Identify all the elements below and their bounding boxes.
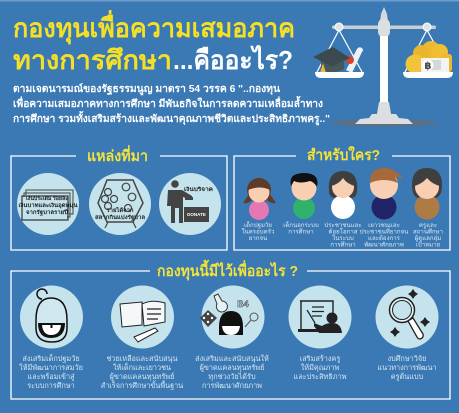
person: citizen xyxy=(324,171,362,248)
item: book support: ช่วยเหลือและสนับสนุน xyxy=(106,354,178,363)
item: teacher development: เสริมสร้างครู xyxy=(300,354,340,363)
icon: donation: เงินบริจาค xyxy=(184,186,213,193)
item: research: แนวทางการพัฒนา xyxy=(377,363,437,372)
person: teacher: ครูและ xyxy=(419,222,437,229)
icon: government budget: เงินประเดิม ร้อยละ xyxy=(26,194,68,202)
item: book support xyxy=(101,286,183,390)
icon: government budget: เงินบาทและเงินอุดหนุน xyxy=(18,202,78,209)
panel: purposes xyxy=(11,259,450,399)
title xyxy=(13,9,295,75)
intro text block: การศึกษา รวมทั้งเสริมสร้างและพัฒนาคุณภาพชีวิตและประสิทธิภาพครู.." xyxy=(13,110,330,126)
title: ...คืออะไร? xyxy=(173,44,293,75)
person: child xyxy=(242,178,276,242)
icon: government budget xyxy=(17,173,79,235)
person: citizen: ประชาชนและ xyxy=(324,222,362,229)
person: citizen: การศึกษา xyxy=(330,242,356,248)
icon: government budget: จากรัฐบาลรายปี xyxy=(26,208,69,216)
item: early childhood: ระบบการศึกษา xyxy=(27,381,75,390)
icon: coins and banknote: ฿ xyxy=(425,61,432,72)
item: talent development: ทุกช่วงวัยได้รับ xyxy=(208,372,256,381)
panel: sources xyxy=(11,145,227,250)
item: research xyxy=(376,286,438,381)
heading: sources: แหล่งที่มา xyxy=(87,145,148,165)
person: youth: ประชาชนที่ยากจน xyxy=(360,228,409,236)
item: research: งบศึกษาวิจัย xyxy=(388,354,426,363)
person: youth: และต้องการ xyxy=(368,235,401,242)
person: youth: พัฒนาศักยภาพ xyxy=(364,242,404,248)
icon: graduation cap and diploma xyxy=(313,47,363,73)
person: teacher: เป้าหมาย xyxy=(416,242,441,248)
item: early childhood: และพร้อมเข้าสู่ xyxy=(27,372,75,381)
item: teacher development xyxy=(288,286,352,381)
item: talent development xyxy=(195,286,269,390)
item: talent development: ส่งเสริมและสนับสนุนให้ xyxy=(195,354,269,363)
person: youth: เยาวชนและ xyxy=(368,222,400,229)
item: book support: สำเร็จการศึกษาขั้นพื้นฐาน xyxy=(101,380,183,390)
panel: beneficiaries xyxy=(234,146,450,250)
item: teacher development: ให้มีคุณภาพ xyxy=(301,363,339,372)
icon: balance scale xyxy=(313,7,453,126)
item: teacher development: และประสิทธิภาพ xyxy=(294,372,347,381)
person: out of school child: เด็กนอกระบบ xyxy=(283,220,319,229)
person: out of school child xyxy=(283,173,319,236)
person: child: ในครอบครัว xyxy=(242,228,274,236)
heading: beneficiaries: สำหรับใคร? xyxy=(307,146,380,164)
item: talent development: การพัฒนาศักยภาพ xyxy=(202,381,262,390)
title: กองทุนเพื่อความเสมอภาค xyxy=(13,9,295,45)
person: child: ยากจน xyxy=(249,235,268,242)
person: citizen: ด้อยโอกาส xyxy=(329,228,358,236)
intro text block: เพื่อความเสมอภาคทางการศึกษา มีพันธกิจในการลดความเหลื่อมล้ำทาง xyxy=(13,95,323,110)
person: child: เด็กปฐมวัย xyxy=(244,220,272,229)
icon: lottery: สลากกินแบ่งรัฐบาล xyxy=(95,214,145,221)
icon: lottery: รายได้จาก xyxy=(106,206,134,214)
person: teacher: สถานศึกษา xyxy=(413,228,443,236)
intro text block: ตามเจตนารมณ์ของรัฐธรรมนูญ มาตรา 54 วรรค 6 "..กองทุน xyxy=(13,83,280,96)
item: talent development: B4 xyxy=(237,299,249,309)
item: early childhood: ส่งเสริมเด็กปฐมวัย xyxy=(22,353,80,363)
item: early childhood xyxy=(19,286,83,390)
item: book support: ให้เด็กและเยาวชน xyxy=(113,362,171,372)
item: early childhood: ให้มีพัฒนาการสมวัย xyxy=(19,363,83,372)
item: research: ครูต้นแบบ xyxy=(391,372,424,381)
item: book support: ผู้ขาดแคลนทุนทรัพย์ xyxy=(110,372,174,381)
person: youth xyxy=(360,168,409,248)
person: teacher xyxy=(412,168,443,248)
person: out of school child: การศึกษา xyxy=(288,228,314,236)
icon: donation: DONATE xyxy=(187,212,206,217)
icon: donation xyxy=(159,173,221,235)
heading: purposes: กองทุนนี้มีไว้เพื่ออะไร ? xyxy=(157,259,298,281)
title: ทางการศึกษา xyxy=(13,45,172,75)
intro text block xyxy=(13,83,330,126)
person: teacher: ผู้ดูแลกลุ่ม xyxy=(415,235,441,242)
icon: lottery xyxy=(89,173,151,235)
person: citizen: ในระบบ xyxy=(332,234,354,242)
item: talent development: ผู้ขาดแคลนทุนทรัพย์ xyxy=(200,363,264,372)
